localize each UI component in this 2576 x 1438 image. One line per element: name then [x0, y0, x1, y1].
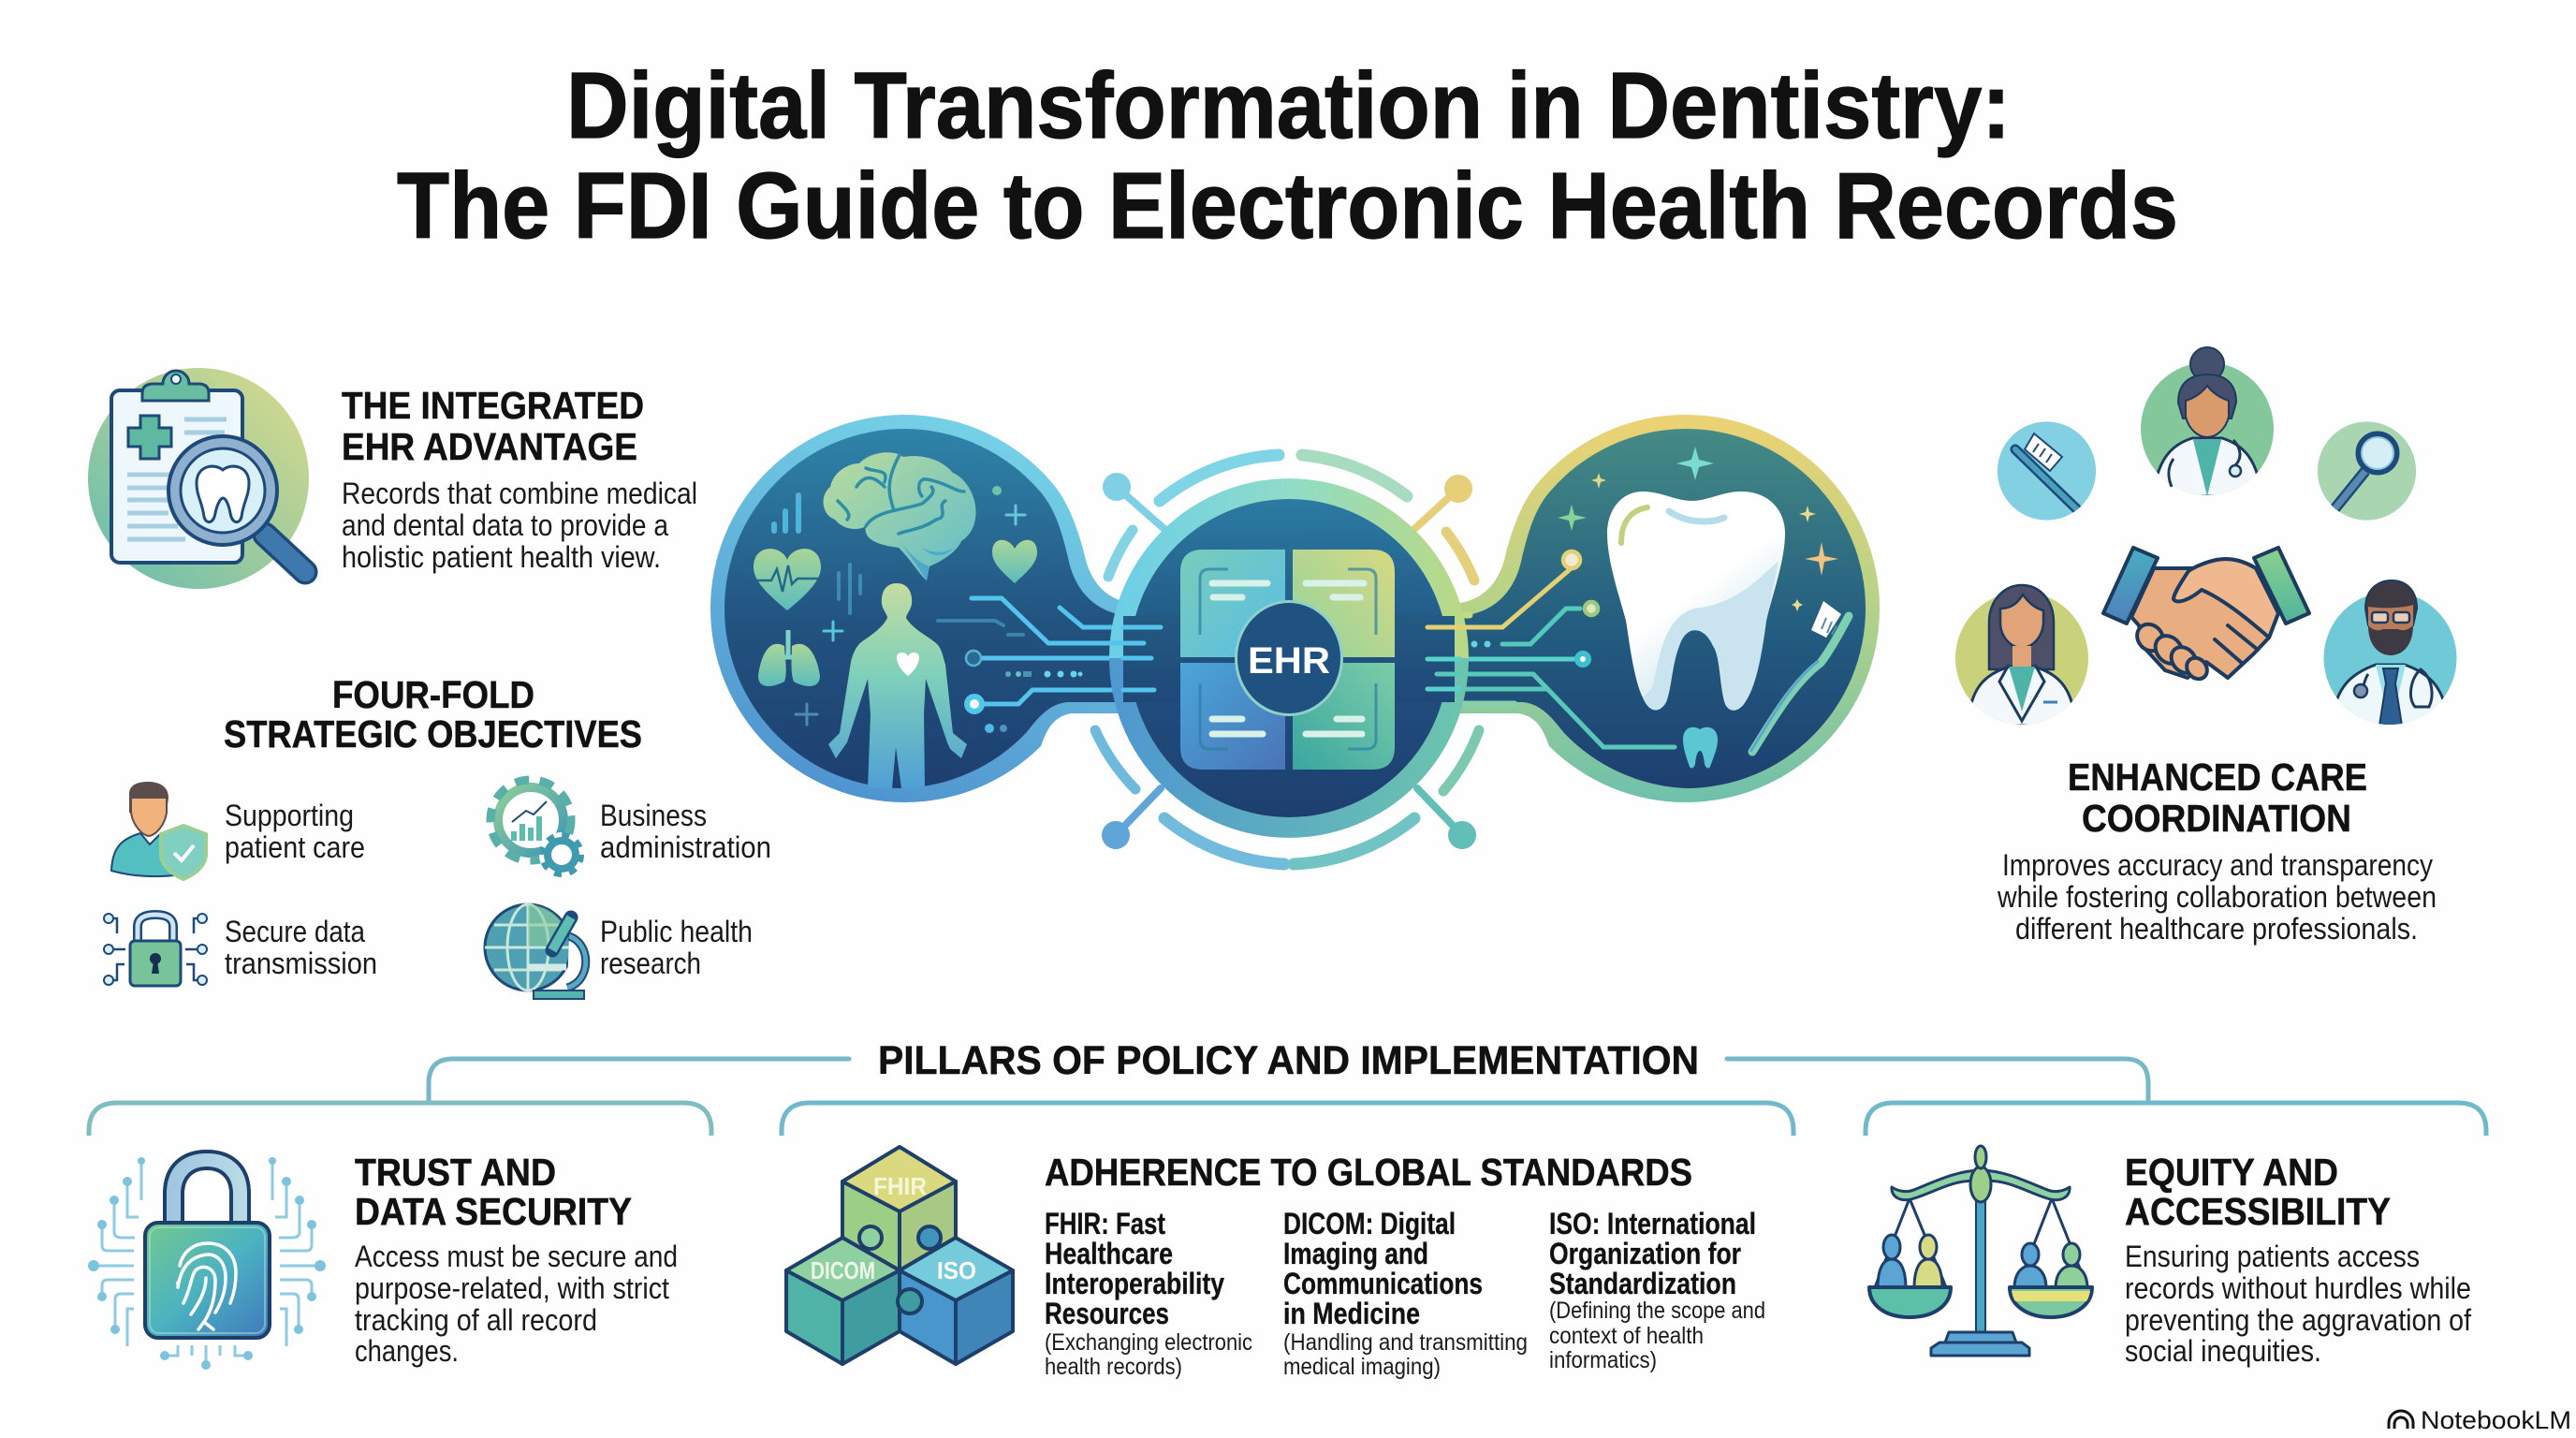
standard: ISO: informatics)	[1549, 1347, 1657, 1373]
text block: integrated advantage: and dental data to provide a	[342, 508, 668, 542]
bracket connectors	[89, 1059, 2486, 1136]
panel: integrated EHR advantage	[88, 368, 697, 589]
text: supporting patient care	[225, 799, 365, 864]
heading: equity: EQUITY AND	[2125, 1151, 2338, 1194]
text block: equity: preventing the aggravation of	[2125, 1303, 2471, 1337]
central illustration: medical and dental data joined by EHR	[710, 415, 1880, 864]
heading: integrated advantage: THE INTEGRATED	[342, 384, 644, 427]
panel: equity and accessibility	[1869, 1146, 2471, 1368]
icon: patient with shield	[111, 782, 206, 879]
standard: DICOM: in Medicine	[1283, 1297, 1420, 1330]
heading: trust: TRUST AND	[355, 1151, 556, 1194]
panel: adherence to global standards	[786, 1147, 1765, 1380]
icon: notebook arcs	[2389, 1411, 2413, 1429]
wordmark: NotebookLM	[2421, 1406, 2571, 1434]
standard: FHIR: Resources	[1045, 1297, 1169, 1330]
text: business administration: Business	[600, 799, 707, 832]
circuit nodes, left	[966, 651, 1082, 733]
text block: trust: changes.	[355, 1334, 459, 1368]
circuit nodes, right	[1471, 551, 1598, 665]
standard: DICOM: medical imaging)	[1283, 1354, 1441, 1380]
re-laid traces across hub edge	[1107, 627, 1502, 690]
heading: integrated advantage: EHR ADVANTAGE	[342, 425, 637, 468]
text block: integrated advantage	[342, 477, 697, 574]
text block: care coordination: while fostering collaboration between	[1997, 880, 2437, 914]
icon: interlocking standards cubes	[786, 1147, 1013, 1364]
title: The FDI Guide to Electronic Health Records	[397, 154, 2178, 258]
heading: four-fold objectives	[224, 673, 642, 756]
standard: FHIR	[1045, 1207, 1252, 1380]
icon: small tooth	[1683, 727, 1718, 768]
text: public health research: research	[600, 946, 701, 980]
text block: integrated advantage: holistic patient health view.	[342, 540, 661, 574]
heading: four-fold objectives: FOUR-FOLD	[332, 673, 534, 716]
text block: equity	[2125, 1240, 2471, 1368]
heading: integrated advantage	[342, 384, 644, 468]
text: secure data transmission: transmission	[225, 946, 377, 980]
standard: ISO: context of health	[1549, 1323, 1704, 1349]
icon: toothbrush badge	[1998, 421, 2096, 521]
heading: trust: DATA SECURITY	[355, 1190, 632, 1233]
EHR core label	[1235, 600, 1343, 716]
panel: enhanced care coordination	[1955, 347, 2456, 946]
text block: trust	[355, 1240, 678, 1368]
standard: FHIR: (Exchanging electronic	[1045, 1329, 1252, 1356]
heading: four-fold objectives: STRATEGIC OBJECTIVES	[224, 712, 642, 756]
standard: DICOM: Imaging and	[1283, 1237, 1428, 1270]
cube labels: DICOM	[811, 1256, 875, 1284]
text: business administration	[600, 799, 771, 864]
text: supporting patient care: Supporting	[225, 799, 354, 832]
text: public health research: Public health	[600, 915, 753, 948]
icon: heart with pulse	[754, 549, 821, 610]
icon: handshake	[2103, 548, 2309, 683]
data quadrant panels	[1180, 550, 1395, 770]
text block: equity: social inequities.	[2125, 1334, 2321, 1368]
pillars section heading with connector brackets	[89, 1038, 2486, 1136]
heading: equity: ACCESSIBILITY	[2125, 1190, 2391, 1233]
standard: FHIR: Healthcare	[1045, 1237, 1173, 1270]
icon: doctor with bun	[2141, 347, 2274, 496]
standard: FHIR: FHIR: Fast	[1045, 1207, 1165, 1240]
standard: FHIR: health records)	[1045, 1354, 1182, 1380]
standard: ISO: Organization for	[1549, 1237, 1741, 1270]
heading: care coordination	[2068, 756, 2367, 840]
standard: ISO: (Defining the scope and	[1549, 1298, 1765, 1324]
EHR core label: EHR	[1248, 640, 1330, 682]
icon: heart	[992, 540, 1037, 583]
title	[397, 53, 2178, 258]
icon: doctor with long hair	[1955, 585, 2088, 726]
text block: care coordination: Improves accuracy and transparency	[2002, 848, 2433, 882]
standard: FHIR: Interoperability	[1045, 1267, 1224, 1300]
heading: pillars: PILLARS OF POLICY AND IMPLEMENTATION	[878, 1038, 1699, 1083]
text: supporting patient care: patient care	[225, 830, 365, 864]
standard: ISO: ISO: International	[1549, 1207, 1756, 1240]
icon: clipboard with magnifier and tooth	[88, 368, 309, 589]
title: Digital Transformation in Dentistry:	[566, 53, 2011, 158]
icon: sparkles	[1558, 447, 1838, 611]
icon: balance scales with people	[1869, 1146, 2092, 1356]
heading: trust	[355, 1151, 632, 1233]
cube labels	[811, 1172, 976, 1284]
text block: equity: records without hurdles while	[2125, 1271, 2471, 1305]
circuit traces, left	[938, 598, 1161, 704]
heading: global standards: ADHERENCE TO GLOBAL STANDARDS	[1045, 1151, 1692, 1194]
text: secure data transmission	[225, 915, 377, 980]
text: public health research	[600, 915, 753, 980]
icon: fingerprint padlock with circuits	[88, 1152, 326, 1370]
heading: equity	[2125, 1151, 2391, 1233]
icon: large tooth	[1607, 492, 1785, 711]
left lobe: whole-body medical data	[710, 415, 1179, 802]
panel: four-fold strategic objectives	[104, 673, 771, 999]
icon: brain	[824, 452, 975, 580]
heading: care coordination: ENHANCED CARE	[2068, 756, 2367, 799]
icon: dental mirror badge	[2318, 421, 2416, 521]
icon: globe and microscope	[485, 904, 586, 999]
icon: lungs	[758, 630, 820, 686]
decorative arcs and nodes around the EHR core	[1095, 455, 1479, 864]
text block: trust: Access must be secure and	[355, 1240, 678, 1273]
icon: doctor with glasses and beard	[2323, 580, 2456, 726]
text: business administration: administration	[600, 830, 771, 864]
icon: padlock with circuits	[104, 914, 207, 986]
NotebookLM logo	[2389, 1406, 2571, 1434]
standard: DICOM: (Handling and transmitting	[1283, 1329, 1528, 1356]
text block: equity: Ensuring patients access	[2125, 1240, 2420, 1273]
icon: toothbrush	[1750, 601, 1849, 752]
text block: care coordination	[1997, 848, 2437, 946]
icon: gears with chart	[490, 780, 584, 877]
cube labels: FHIR	[873, 1172, 927, 1200]
icon: human body	[828, 583, 967, 788]
data marks in left lobe	[774, 486, 1025, 725]
text block: care coordination: different healthcare professionals.	[2015, 912, 2418, 946]
standard: DICOM: DICOM: Digital	[1283, 1207, 1456, 1240]
EHR hub	[1107, 489, 1502, 828]
standard: ISO	[1549, 1207, 1765, 1373]
standard: DICOM	[1283, 1207, 1528, 1380]
text block: integrated advantage: Records that combine medical	[342, 477, 697, 510]
circuit traces, right	[1427, 565, 1675, 747]
text: secure data transmission: Secure data	[225, 915, 365, 948]
text block: trust: purpose-related, with strict	[355, 1271, 669, 1305]
panel: trust and data security	[88, 1151, 678, 1370]
standard: DICOM: Communications	[1283, 1267, 1483, 1300]
cube labels: ISO	[937, 1256, 976, 1284]
right lobe: dental data	[1411, 415, 1880, 802]
standard: ISO: Standardization	[1549, 1267, 1736, 1300]
heading: care coordination: COORDINATION	[2082, 797, 2351, 840]
text block: trust: tracking of all record	[355, 1303, 597, 1337]
